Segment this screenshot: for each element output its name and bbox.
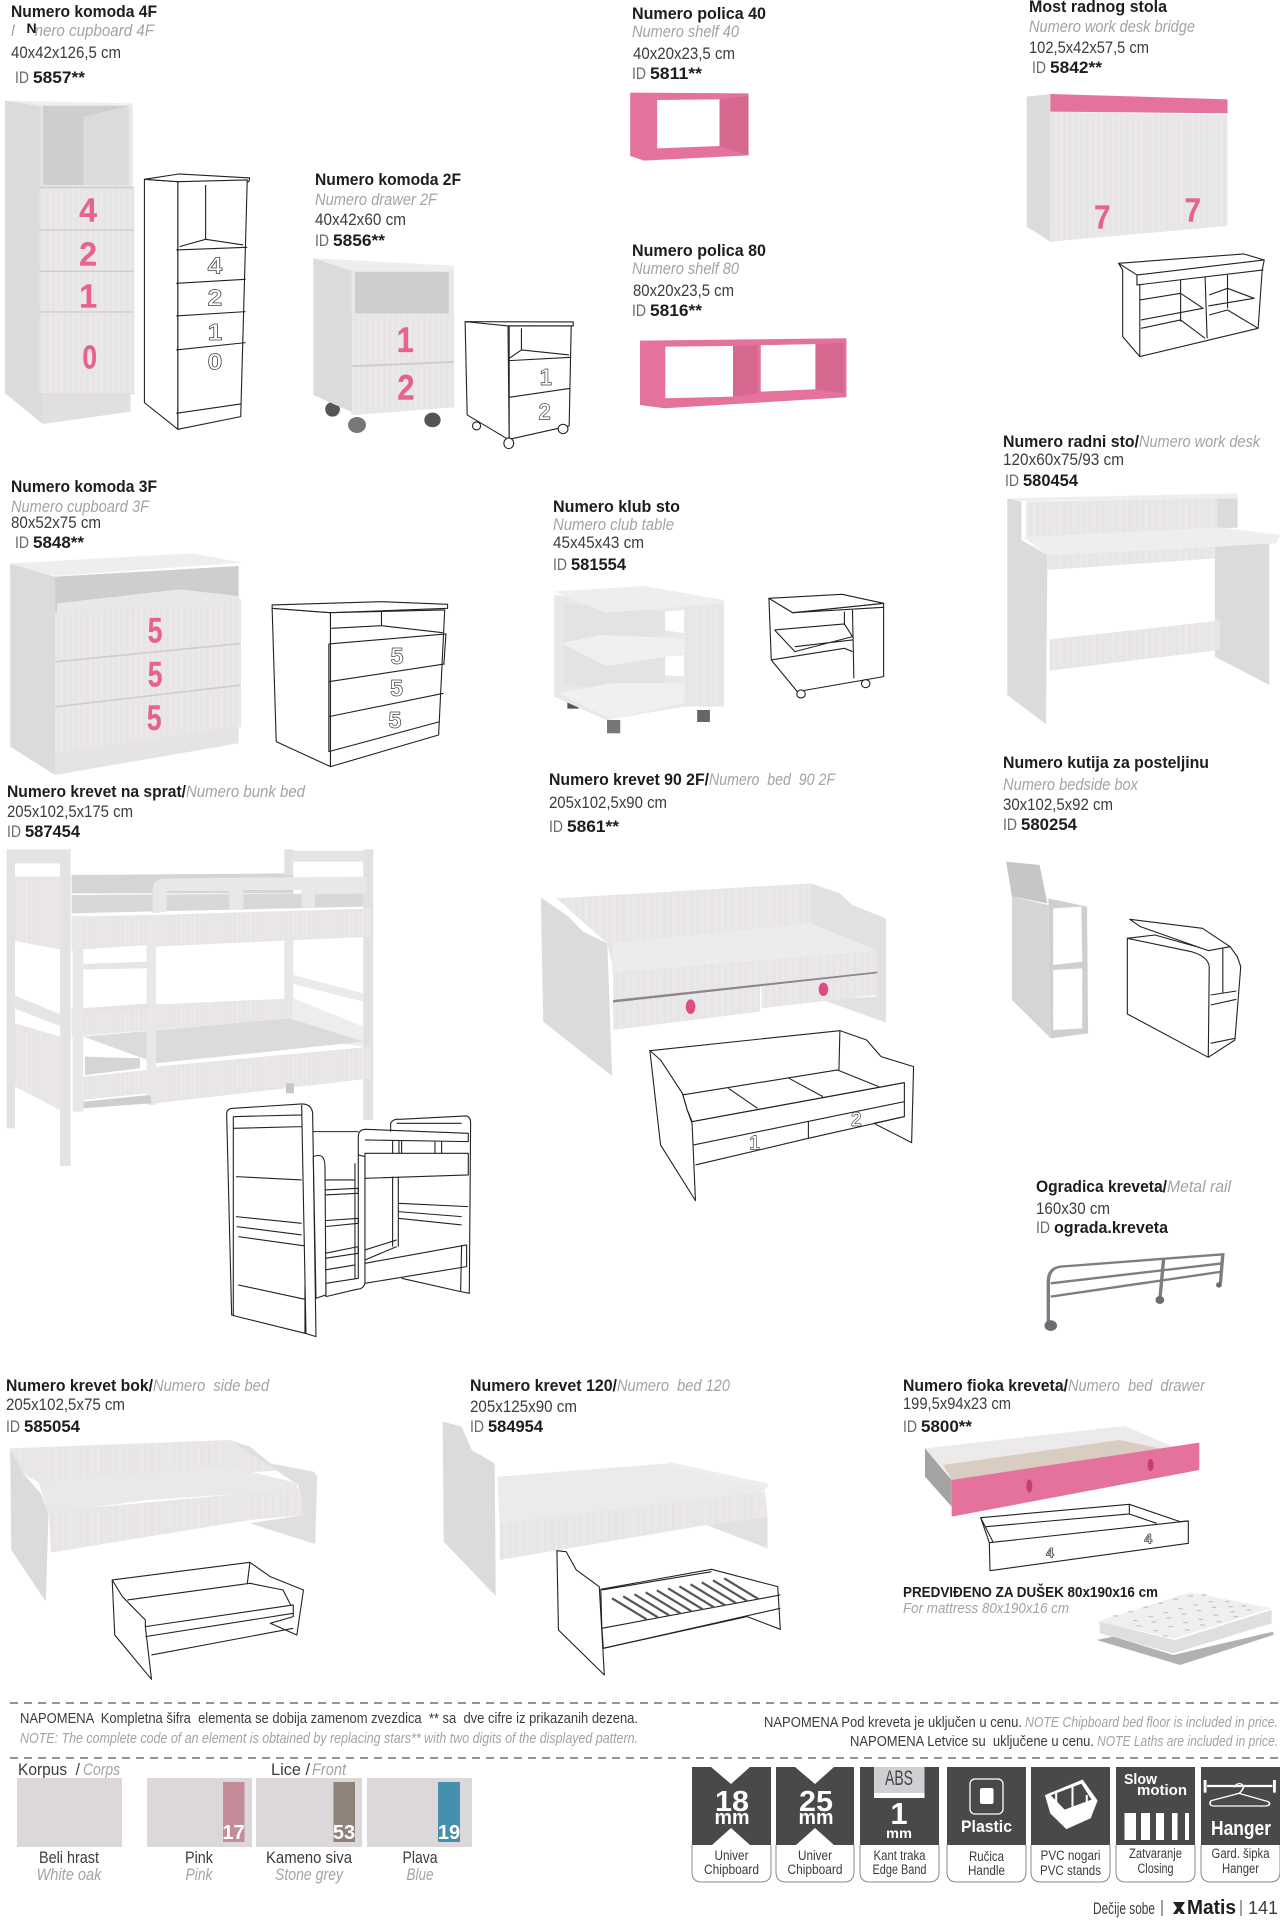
product: Numero fioka kreveta xyxy=(903,1376,1273,1665)
page footer xyxy=(1093,1897,1278,1919)
product: Numero komoda 2F xyxy=(313,170,573,449)
icon: slow motion closing: Closing xyxy=(1138,1861,1174,1876)
line drawing: side bed xyxy=(112,1562,303,1679)
dimensions: 102,5x42x57,5 cm xyxy=(1029,39,1149,57)
dimensions: 160x30 cm xyxy=(1036,1200,1110,1218)
icon: 25 mm chipboard: Univer xyxy=(798,1848,832,1863)
line drawing: desk bridge xyxy=(1119,254,1264,357)
subtitle: Numero bedside box xyxy=(1003,776,1139,794)
legend heading: corpus: Korpus / xyxy=(18,1761,80,1779)
heading: Numero bed 90 2F xyxy=(709,771,836,789)
ID: ID xyxy=(632,65,646,83)
line drawing: drawer unit xyxy=(465,322,573,449)
ID xyxy=(632,65,703,83)
heading: Numero polica 40 xyxy=(632,4,766,23)
product: Numero krevet na sprat xyxy=(7,782,471,1337)
heading: Numero bed 120 xyxy=(617,1377,731,1395)
dimensions: 199,5x94x23 cm xyxy=(903,1395,1011,1413)
ID: 5816** xyxy=(650,302,703,320)
note: code completion: NAPOMENA Kompletna šifra elementa se dobija zamenom zvezdica ** sa dve cifre iz prikazanih dezena. xyxy=(20,1711,638,1727)
ID: 581554 xyxy=(571,556,627,574)
product: Numero klub sto xyxy=(553,497,884,733)
photo: drawer unit: 2 xyxy=(397,369,415,407)
dimensions: 205x102,5x75 cm xyxy=(6,1396,125,1414)
icon: plastic handle: Handle xyxy=(968,1863,1005,1878)
ID: ID xyxy=(7,823,21,841)
ID: ID xyxy=(470,1418,484,1436)
product: Numero polica 80 xyxy=(632,241,846,408)
line drawing: tall cupboard: 1 xyxy=(208,320,222,345)
ID: 584954 xyxy=(488,1418,544,1436)
photo: tall cupboard: 0 xyxy=(82,338,97,376)
icon: 25 mm chipboard: mm xyxy=(798,1807,834,1829)
line drawing: tall cupboard: 2 xyxy=(208,286,222,311)
spec icons xyxy=(692,1767,1280,1882)
icon: 25 mm chipboard: 25 xyxy=(799,1786,833,1818)
line drawing: bunk bed xyxy=(227,1104,471,1337)
colour legend xyxy=(17,1761,472,1884)
product: Numero komoda 4F xyxy=(5,2,250,429)
dimensions: 40x42x60 cm xyxy=(315,211,406,229)
note: code completion: NOTE: The complete code of an element is obtained by replacing stars** with two digits of the displayed pattern. xyxy=(20,1731,638,1747)
subtitle: N xyxy=(26,20,37,36)
product: Numero komoda 3F xyxy=(10,477,448,775)
dimensions: 205x102,5x175 cm xyxy=(7,803,133,821)
ID: ograda.kreveta xyxy=(1054,1219,1169,1237)
line drawing: bed drawer: 4 xyxy=(1046,1544,1054,1560)
subtitle: Numero work desk bridge xyxy=(1029,18,1195,36)
heading xyxy=(1003,432,1261,451)
photo: drawer unit xyxy=(313,258,454,433)
note: bed floor and laths xyxy=(764,1715,1278,1750)
photo: bed drawer xyxy=(925,1426,1199,1517)
icon: ABS edge band: 1 xyxy=(890,1796,908,1831)
product: Numero krevet 90 2F xyxy=(541,770,914,1201)
product: Most radnog stola xyxy=(1027,0,1264,357)
product: Numero radni sto xyxy=(1003,432,1280,724)
photo: club table xyxy=(554,586,724,733)
photo: bedside box xyxy=(1006,862,1088,1038)
ID: ID xyxy=(315,232,329,250)
page footer: Dečije sobe xyxy=(1093,1900,1155,1918)
photo: chest of drawers: 5 xyxy=(148,612,162,651)
heading: Numero polica 80 xyxy=(632,241,766,260)
ID: 5848** xyxy=(33,534,85,552)
ID: ID xyxy=(6,1418,20,1436)
photo: pink shelf 40 xyxy=(630,93,749,161)
line drawing: club table xyxy=(769,594,884,698)
heading: Numero komoda 4F xyxy=(11,2,157,21)
line drawing: bedside box xyxy=(1127,919,1241,1057)
icon: ABS edge band: Edge Band xyxy=(872,1862,926,1877)
ID: ID xyxy=(1036,1219,1050,1237)
page footer: 141 xyxy=(1248,1898,1278,1918)
photo: drawer unit: 1 xyxy=(397,322,414,360)
legend heading: corpus xyxy=(18,1761,120,1779)
subtitle: Numero cupboard 3F xyxy=(11,498,150,516)
dimensions: 30x102,5x92 cm xyxy=(1003,796,1113,814)
icon: plastic handle xyxy=(947,1767,1026,1882)
ID: 5856** xyxy=(333,232,386,250)
dimensions: 205x102,5x90 cm xyxy=(549,794,667,812)
icon: 18 mm chipboard: Univer xyxy=(714,1848,749,1863)
photo: metal rail xyxy=(1044,1254,1223,1331)
ID: 5811** xyxy=(650,65,703,83)
icon: hanger rod: Hanger xyxy=(1211,1818,1271,1840)
icon: 18 mm chipboard xyxy=(692,1767,771,1882)
photo: side bed xyxy=(10,1440,317,1602)
heading: Ogradica kreveta/ xyxy=(1036,1177,1167,1196)
icon: ABS edge band: Kant traka xyxy=(874,1848,926,1863)
product: Numero kutija za posteljinu xyxy=(1003,753,1241,1057)
heading: Numero krevet 120/ xyxy=(470,1376,617,1395)
swatch: white oak: Beli hrast xyxy=(39,1849,99,1867)
product: Numero krevet 120 xyxy=(443,1376,780,1675)
ID: ID xyxy=(15,534,29,552)
icon: slow motion closing: Slow xyxy=(1124,1771,1157,1788)
heading xyxy=(903,1376,1206,1395)
icon: ABS edge band xyxy=(860,1767,939,1882)
swatch: pink: Pink xyxy=(185,1849,214,1867)
note: code completion xyxy=(20,1711,638,1747)
ID: 585054 xyxy=(24,1418,81,1436)
swatch: white oak xyxy=(17,1778,122,1884)
ID: 587454 xyxy=(25,823,81,841)
dimensions: 40x42x126,5 cm xyxy=(11,44,121,62)
dimensions: 45x45x43 cm xyxy=(553,534,644,552)
icon: hanger rod: Gard. šipka xyxy=(1212,1846,1270,1861)
heading: Numero radni sto/ xyxy=(1003,432,1139,451)
heading: Numero klub sto xyxy=(553,497,680,516)
line drawing: chest of drawers: 5 xyxy=(390,676,403,701)
heading: Numero krevet bok/ xyxy=(6,1376,153,1395)
note: bed floor and laths: NAPOMENA Letvice su uključene u cenu. xyxy=(850,1734,1094,1750)
photo: tall cupboard xyxy=(5,101,134,424)
heading: Numero komoda 2F xyxy=(315,170,461,189)
swatch: blue: 19 xyxy=(438,1822,460,1844)
subtitle: Numero drawer 2F xyxy=(315,191,438,209)
ID: ID xyxy=(15,69,29,87)
icon: 25 mm chipboard: Chipboard xyxy=(788,1862,842,1877)
photo: pink shelf 80 xyxy=(640,338,846,408)
heading: Numero krevet 90 2F/ xyxy=(549,770,709,789)
heading xyxy=(470,1376,731,1395)
legend heading: front: Front xyxy=(312,1761,347,1779)
photo: desk bridge xyxy=(1027,94,1228,242)
legend heading: front xyxy=(271,1761,347,1779)
legend heading: front: Lice / xyxy=(271,1761,310,1779)
heading: Numero bed drawer xyxy=(1068,1377,1206,1395)
swatch: pink: 17 xyxy=(222,1822,245,1844)
dimensions: 205x125x90 cm xyxy=(470,1398,577,1416)
photo: bed 120 xyxy=(443,1422,768,1596)
mattress note: PREDVIĐENO ZA DUŠEK 80x190x16 cm xyxy=(903,1583,1158,1601)
icon: PVC stands: PVC nogari xyxy=(1040,1848,1100,1863)
subtitle: Numero club table xyxy=(553,516,674,534)
icon: plastic handle: Plastic xyxy=(961,1817,1012,1836)
line drawing: bed drawer xyxy=(981,1504,1188,1571)
icon: ABS edge band: ABS xyxy=(885,1767,913,1790)
swatch: pink xyxy=(147,1778,252,1884)
ID: ID xyxy=(1005,472,1019,490)
photo: tall cupboard: 1 xyxy=(79,277,97,314)
product: Numero krevet bok xyxy=(6,1376,317,1679)
heading: Numero komoda 3F xyxy=(11,477,157,496)
swatch: stone grey xyxy=(256,1778,362,1884)
icon: plastic handle: Ručica xyxy=(969,1849,1004,1864)
swatch: blue: Plava xyxy=(402,1849,438,1867)
icon: hanger rod xyxy=(1201,1767,1280,1882)
subtitle: Numero cupboard 4F xyxy=(11,22,155,40)
line drawing: bed 90 with drawers xyxy=(650,1031,914,1201)
icon: ABS edge band: mm xyxy=(886,1825,912,1841)
heading: Numero work desk xyxy=(1139,433,1261,451)
icon: hanger rod: Hanger xyxy=(1222,1861,1259,1876)
dimensions: 120x60x75/93 cm xyxy=(1003,451,1124,469)
subtitle: Numero shelf 40 xyxy=(632,23,740,41)
swatch: stone grey: Kameno siva xyxy=(266,1849,353,1867)
photo: mattress xyxy=(1097,1592,1273,1665)
photo: chest of drawers xyxy=(10,553,243,775)
product: Numero polica 40 xyxy=(630,4,766,161)
photo: desk bridge: 7 xyxy=(1185,191,1201,228)
heading: Numero bunk bed xyxy=(186,783,306,801)
heading: Numero kutija za posteljinu xyxy=(1003,753,1209,772)
dimensions: 40x20x23,5 cm xyxy=(633,45,735,63)
line drawing: drawer unit: 1 xyxy=(540,365,552,390)
ID: ID xyxy=(1032,59,1046,77)
icon: slow motion closing xyxy=(1116,1767,1195,1882)
mattress note translation: For mattress 80x190x16 cm xyxy=(903,1600,1069,1617)
photo: chest of drawers: 5 xyxy=(147,700,162,738)
dimensions: 80x20x23,5 cm xyxy=(633,282,734,300)
line drawing: bed 120 xyxy=(557,1551,780,1675)
photo: work desk xyxy=(1007,493,1280,724)
line drawing: tall cupboard: 0 xyxy=(208,350,222,375)
logo: Matis: Matis xyxy=(1187,1897,1236,1919)
icon: PVC stands xyxy=(1031,1767,1110,1882)
subtitle: Numero shelf 80 xyxy=(632,260,740,278)
line drawing: bed drawer: 4 xyxy=(1144,1530,1152,1546)
heading xyxy=(549,770,836,789)
swatch: white oak: White oak xyxy=(36,1866,102,1884)
icon: slow motion closing: Zatvaranje xyxy=(1129,1846,1182,1861)
swatch: blue xyxy=(367,1778,472,1884)
icon: 18 mm chipboard: 18 xyxy=(715,1786,749,1818)
photo: tall cupboard: 4 xyxy=(79,191,97,228)
swatch: pink: Pink xyxy=(186,1866,213,1884)
ID: ID xyxy=(1003,816,1017,834)
icon: PVC stands: PVC stands xyxy=(1040,1863,1101,1878)
ID: 5861** xyxy=(567,818,620,836)
icon: 18 mm chipboard: mm xyxy=(714,1807,750,1829)
swatch: stone grey: Stone grey xyxy=(275,1866,344,1884)
line drawing: chest of drawers: 5 xyxy=(388,708,401,733)
ID: ID xyxy=(549,818,563,836)
ID: ID xyxy=(903,1418,917,1436)
ID: 5800** xyxy=(921,1418,973,1436)
line drawing: bed 90 with drawers: 2 xyxy=(851,1108,862,1131)
note: bed floor and laths: NAPOMENA Pod kreveta je uključen u cenu. xyxy=(764,1715,1022,1731)
ID: 5857** xyxy=(33,69,86,87)
line drawing: chest of drawers: 5 xyxy=(390,644,404,669)
photo: tall cupboard: 2 xyxy=(79,235,97,272)
icon: 25 mm chipboard xyxy=(776,1767,854,1882)
dimensions: 80x52x75 cm xyxy=(11,514,101,532)
photo: bed 90 with drawers xyxy=(541,883,886,1076)
heading: Numero fioka kreveta/ xyxy=(903,1376,1068,1395)
divider dashes xyxy=(10,1703,1280,1758)
heading: Metal rail xyxy=(1167,1178,1232,1196)
legend heading: corpus: Corps xyxy=(83,1761,120,1779)
icon: slow motion closing: motion xyxy=(1137,1782,1187,1799)
photo: desk bridge: 7 xyxy=(1094,198,1110,236)
ID: 580254 xyxy=(1021,816,1078,834)
line drawing: bed 90 with drawers: 1 xyxy=(749,1132,760,1154)
ID: 580454 xyxy=(1023,472,1079,490)
swatch: blue: Blue xyxy=(406,1866,434,1884)
ID: ID xyxy=(632,302,646,320)
line drawing: chest of drawers xyxy=(272,602,448,767)
photo: bunk bed xyxy=(7,849,373,1166)
heading xyxy=(7,782,306,801)
product: Ogradica kreveta xyxy=(1036,1177,1232,1331)
ID: ID xyxy=(553,556,567,574)
swatch: stone grey: 53 xyxy=(333,1822,355,1844)
ID: 5842** xyxy=(1050,59,1103,77)
line drawing: tall cupboard xyxy=(144,174,250,429)
photo: chest of drawers: 5 xyxy=(148,656,162,695)
line drawing: drawer unit: 2 xyxy=(539,400,551,425)
icon: 18 mm chipboard: Chipboard xyxy=(704,1862,759,1877)
heading: Numero krevet na sprat/ xyxy=(7,782,186,801)
line drawing: tall cupboard: 4 xyxy=(208,254,222,279)
heading: Numero side bed xyxy=(153,1377,270,1395)
heading xyxy=(6,1376,270,1395)
